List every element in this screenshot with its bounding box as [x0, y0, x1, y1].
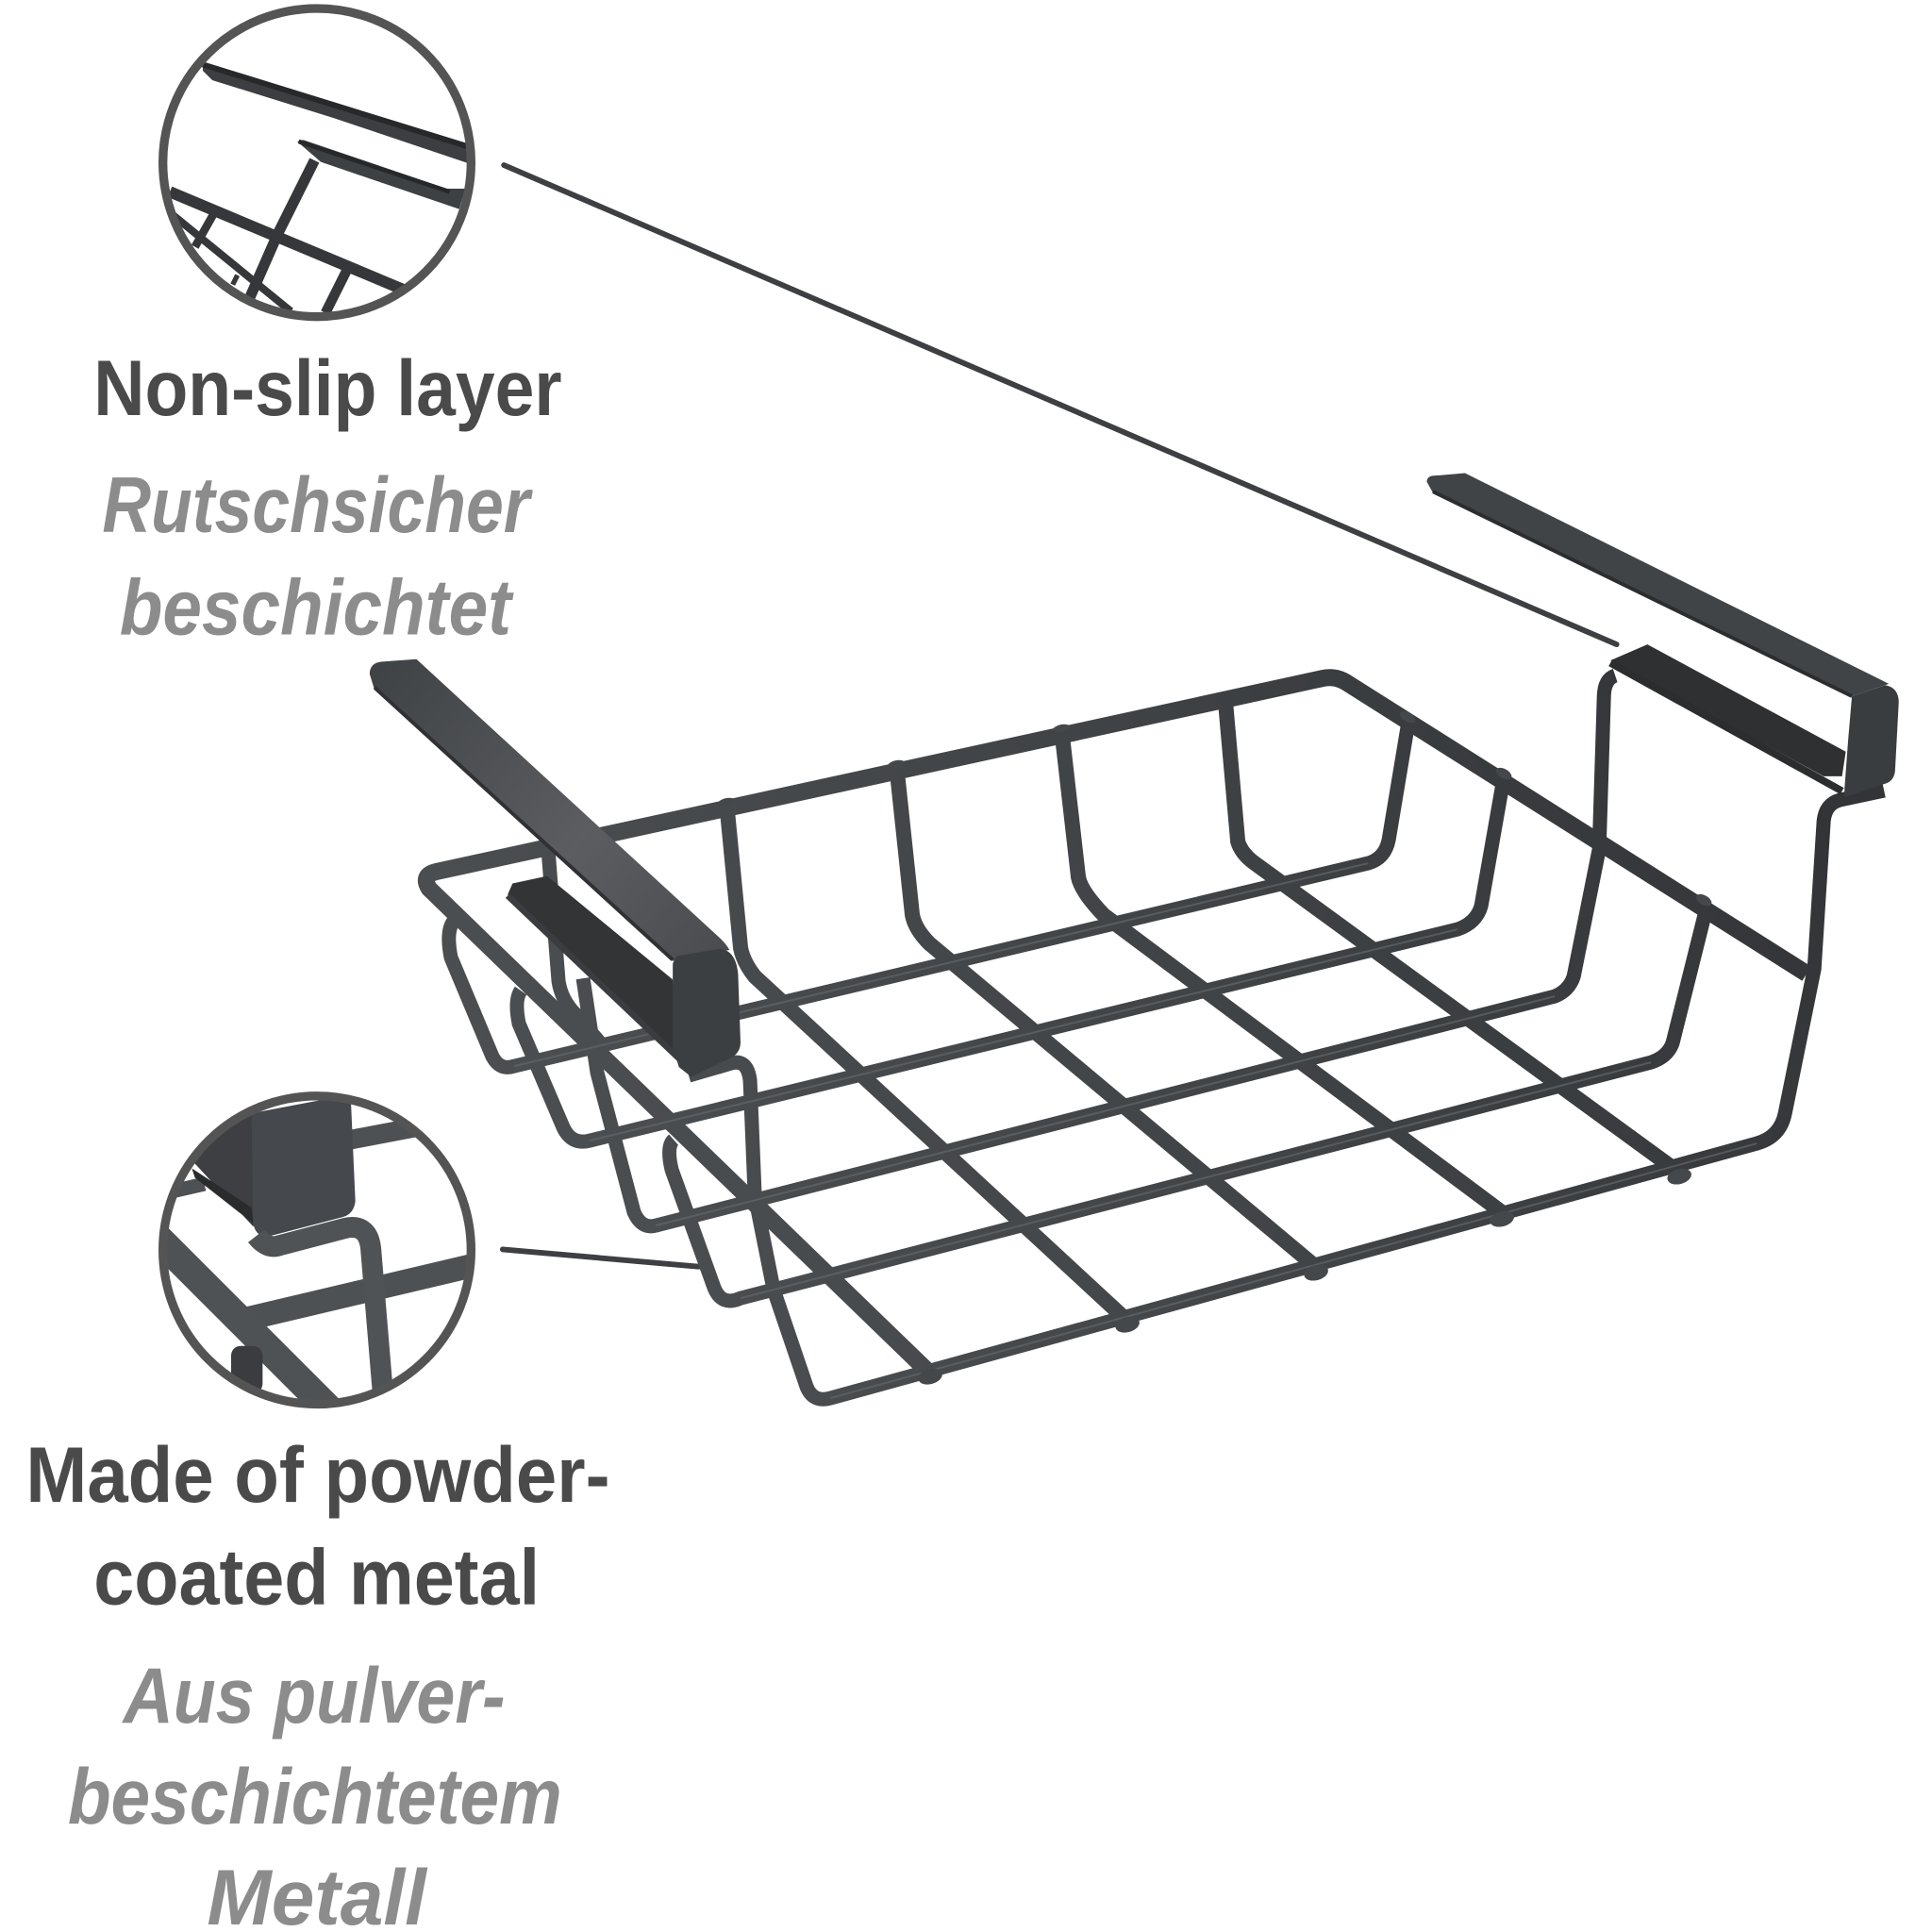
- wire highlights: [514, 863, 1757, 1398]
- long floor wires: [547, 703, 1679, 1321]
- cross wire D: [669, 910, 1706, 1301]
- left bracket: [370, 659, 741, 1077]
- heading: Made of powder-coated metal: [25, 1430, 610, 1622]
- wire basket: [370, 474, 1899, 1399]
- rim rails: [426, 677, 1807, 1373]
- top strip: [1426, 474, 1889, 696]
- heading: Made of powder-coated metal: coated metal: [93, 1533, 540, 1622]
- front face: [1844, 685, 1899, 797]
- foot tab: [231, 1346, 262, 1393]
- felt pad: [508, 876, 676, 1055]
- right bracket: [1426, 474, 1899, 797]
- subheading: Rutschsicher beschichtet: [102, 460, 533, 652]
- subheading: Aus pulverbeschichtetem Metall: Aus pulver-: [122, 1651, 506, 1740]
- diagonal rail band: [158, 1238, 333, 1413]
- front wire and hook: [689, 791, 1884, 1399]
- cross wire C: [583, 675, 1615, 1226]
- subheading: Rutschsicher beschichtet: beschichtet: [120, 563, 514, 652]
- detail circle: powder-coated metal: [158, 1094, 472, 1413]
- bracket plate: [252, 1094, 356, 1237]
- lower strip detail: [297, 140, 465, 209]
- top strip: [370, 659, 729, 961]
- cross wire B: [517, 788, 1502, 1141]
- detail circle: non-slip layer: [163, 8, 471, 317]
- tabs: [717, 708, 1713, 1387]
- horizontal wire bars: [170, 1127, 472, 1319]
- subheading: Rutschsicher beschichtet: Rutschsicher: [102, 460, 533, 549]
- wire frame: [426, 675, 1884, 1399]
- wire details: [170, 160, 403, 313]
- felt pad: [1610, 644, 1846, 776]
- heading: Non-slip layer: Non-slip layer: [93, 343, 562, 432]
- callout line: powder-coated metal: [503, 1249, 699, 1267]
- heading: Made of powder-coated metal: Made of powder-: [25, 1430, 610, 1519]
- subheading: Aus pulverbeschichtetem Metall: beschichtetem: [68, 1752, 562, 1840]
- cross wire A: [449, 726, 1407, 1067]
- front face: [673, 949, 741, 1077]
- felt underside: [194, 1115, 254, 1226]
- upper strip detail: [203, 64, 467, 163]
- hook wire: [257, 1227, 384, 1403]
- subheading: Aus pulverbeschichtetem Metall: [68, 1651, 562, 1932]
- callout line: non-slip layer: [504, 165, 1617, 644]
